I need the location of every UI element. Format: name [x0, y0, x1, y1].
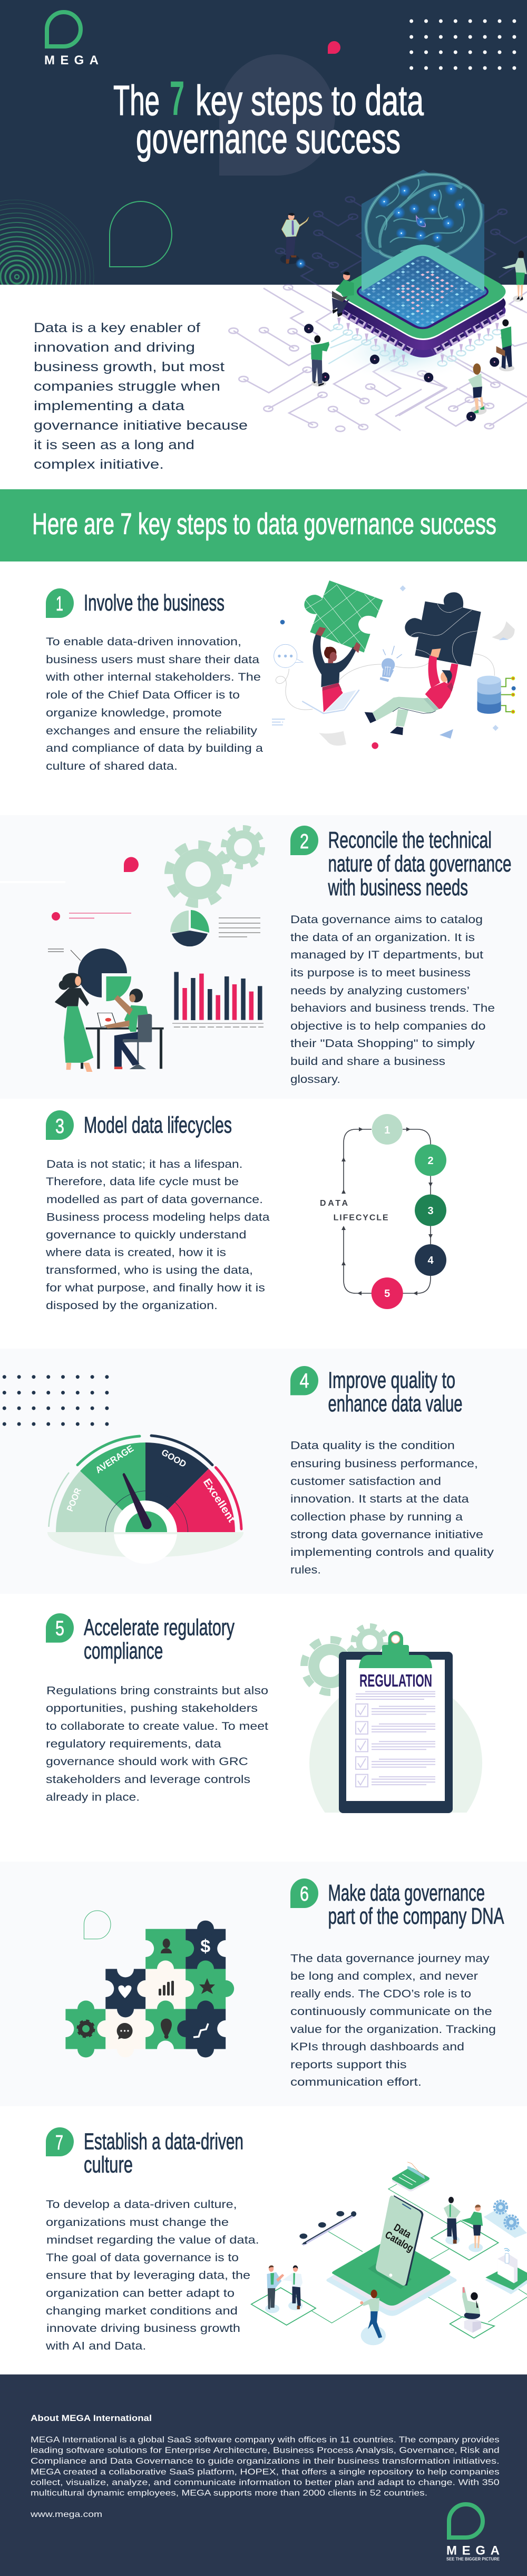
chip	[340, 245, 506, 357]
icon: heart	[118, 1986, 132, 1998]
panel: step 6	[0, 1862, 527, 2106]
small decorative shapes	[272, 585, 516, 749]
data balls	[296, 258, 499, 421]
person pointing	[280, 213, 309, 264]
icon: light bulb	[380, 646, 402, 682]
puzzle knobs and notches	[57, 1921, 234, 2057]
body 6: communication effort.	[290, 2076, 422, 2088]
node 5	[372, 1277, 403, 1309]
brain	[366, 175, 481, 260]
woman right	[468, 363, 486, 415]
panel: step 4	[0, 1349, 527, 1594]
title: governance success	[136, 115, 401, 162]
person with briefcase	[496, 319, 514, 371]
people on chip	[280, 213, 527, 421]
node 1	[372, 1114, 403, 1145]
body 2: build and share a business	[290, 1055, 445, 1068]
icon: red drop	[328, 41, 340, 54]
icon: speech bubble	[274, 644, 303, 667]
body 3: transformed, who is using the data,	[46, 1264, 253, 1276]
person: woman	[302, 627, 360, 713]
clip	[359, 1631, 432, 1668]
body 5: governance should work with GRC	[46, 1756, 248, 1768]
body 4: customer satisfaction and	[290, 1475, 441, 1488]
people pair right	[444, 2197, 483, 2248]
diagram label: LIFECYCLE	[334, 1214, 388, 1223]
footer paragraph: MEGA International is a global SaaS software company with offices in 11 countries. The company provides	[31, 2436, 500, 2445]
node 3: 3	[427, 1205, 434, 1217]
platform	[328, 2238, 455, 2314]
gauge segment: poor: POOR	[65, 1487, 83, 1513]
body 1: role of the Chief Data Officer is to	[46, 689, 240, 701]
gears on pale tile	[484, 2201, 527, 2238]
footer paragraph: multicultural dynamic employees, MEGA supports more than 2000 clients in 52 countries.	[31, 2489, 427, 2498]
node 3	[415, 1195, 446, 1226]
body 1: To enable data-driven innovation,	[46, 636, 241, 648]
icon: exclamation	[161, 2019, 172, 2039]
body 4: Data quality is the condition	[290, 1440, 455, 1452]
clipboard board	[339, 1652, 453, 1813]
circuit traces	[229, 197, 527, 431]
gauge segment: average	[80, 1442, 145, 1510]
icon: gear	[78, 2021, 94, 2037]
panel: footer	[0, 2374, 527, 2576]
heading 4	[328, 1368, 463, 1417]
intro text: Data is a key enabler of	[34, 321, 200, 335]
icon: database	[477, 676, 515, 714]
badge 6: 6	[300, 1883, 309, 1905]
node 4: 4	[427, 1255, 434, 1266]
top module	[392, 2162, 430, 2192]
panel: step 5	[46, 1613, 482, 1813]
person: man	[365, 648, 458, 735]
illustration: regulation clipboard	[300, 1623, 482, 1813]
body 3: Data is not static; it has a lifespan.	[46, 1158, 242, 1170]
body 3	[45, 1158, 270, 1312]
paper top right	[492, 621, 515, 640]
body 1: organize knowledge, promote	[46, 707, 222, 719]
badge 5	[46, 1613, 74, 1643]
icon: chat bubble	[117, 2023, 133, 2039]
badge 7	[46, 2127, 74, 2156]
logo: MEGA footer: SEE THE BIGGER PICTURE	[446, 2556, 500, 2562]
heading 7: culture	[84, 2152, 133, 2178]
body 2: their "Data Shopping" to simply	[290, 1038, 475, 1050]
outline drop	[110, 201, 172, 267]
badge 2: 2	[300, 830, 309, 853]
teal band	[362, 245, 484, 292]
body 2	[290, 914, 495, 1086]
panel: step 1	[45, 580, 516, 772]
body 5: to collaborate to create value. To meet	[46, 1720, 268, 1732]
intro text: complex initiative.	[34, 457, 164, 472]
illustration: people lifting puzzle pieces	[272, 580, 516, 749]
gauge segment: good: GOOD	[160, 1447, 188, 1469]
body 1: exchanges and ensure the reliability	[46, 725, 258, 737]
phone with data catalog: Catalog	[383, 2229, 415, 2254]
dot grid	[412, 21, 515, 68]
body 7: innovate driving business growth	[46, 2322, 240, 2335]
body 7: ensure that by leveraging data, the	[46, 2270, 250, 2282]
body 3: disposed by the organization.	[46, 1300, 218, 1312]
heading 7	[84, 2129, 243, 2178]
puzzle piece: navy	[405, 592, 481, 666]
footer website: www.mega.com	[30, 2510, 102, 2519]
body 4	[290, 1440, 494, 1576]
badge 3: 3	[55, 1115, 64, 1138]
heading 5: compliance	[84, 1638, 163, 1664]
badge 1: 1	[56, 593, 63, 615]
intro text: it is seen as a long and	[34, 438, 194, 452]
title: 7	[170, 72, 184, 125]
watermark drop shape	[219, 54, 335, 176]
icon: dollar: $	[200, 1936, 210, 1957]
footer paragraph: collect, visualize, analyze, and communicate information to better plan and adapt to change. With 350	[31, 2478, 500, 2487]
body 5: regulatory requirements, data	[46, 1738, 221, 1750]
body 1	[45, 636, 263, 772]
gauge segment: good	[145, 1442, 209, 1510]
footer paragraph: Compliance and Data Governance to guide organizations in their business transformation initiatives.	[31, 2457, 500, 2466]
body 5: Regulations bring constraints but also	[46, 1685, 268, 1697]
badge 5: 5	[55, 1618, 64, 1640]
body 7: To develop a data-driven culture,	[46, 2199, 237, 2211]
heading 6	[328, 1880, 504, 1929]
body 3: Therefore, data life cycle must be	[46, 1176, 239, 1188]
gauge segment: average: AVERAGE	[93, 1443, 135, 1475]
heading 5	[84, 1614, 235, 1664]
gears	[304, 1626, 386, 1692]
gears	[169, 828, 262, 904]
illustration: data catalog isometric	[251, 2162, 527, 2345]
body 1: with other internal stakeholders. The	[45, 671, 261, 683]
body 5: stakeholders and leverage controls	[46, 1774, 250, 1786]
people at desk	[55, 973, 164, 1072]
gauge chart	[47, 1436, 243, 1564]
title: key steps to data	[196, 77, 424, 124]
body 6: really ends. The CDO’s role is to	[290, 1988, 471, 2000]
body 5: opportunities, pushing stakeholders	[46, 1702, 258, 1715]
footer paragraph: MEGA created a collaborative SaaS platform, HOPEX, that offers a single repository to help companies	[31, 2467, 500, 2476]
footer paragraph	[31, 2436, 500, 2498]
body 4: implementing controls and quality	[290, 1546, 494, 1558]
body 2: the data of an organization. It is	[290, 932, 475, 944]
large pie chart	[48, 948, 131, 1001]
intro text: companies struggle when	[34, 379, 220, 394]
diagram: data lifecycle	[320, 1114, 446, 1309]
body 7: mindset regarding the value of data.	[46, 2234, 259, 2246]
server module	[485, 2249, 527, 2294]
panel: header	[0, 0, 527, 285]
heading 4: Improve quality to	[328, 1368, 455, 1393]
red drop	[124, 857, 139, 872]
heading 2	[328, 827, 511, 900]
body 1: and compliance of data by building a	[46, 742, 263, 754]
badge 4: 4	[299, 1370, 309, 1392]
heading 3: Model data lifecycles	[84, 1112, 232, 1138]
icon: trend line	[193, 2023, 208, 2037]
body 2: Data governance aims to catalog	[290, 914, 483, 926]
icon: star	[199, 1978, 215, 1994]
body 3: Business process modeling helps data	[46, 1212, 270, 1224]
body 4: innovation. It starts at the data	[290, 1493, 469, 1505]
intro text	[34, 321, 248, 472]
body 3: governance to quickly understand	[46, 1229, 247, 1241]
heading 5: Accelerate regulatory	[84, 1614, 235, 1640]
body 3: modelled as part of data governance.	[46, 1194, 263, 1206]
person sitting with laptop	[332, 272, 354, 317]
body 7: with AI and Data.	[45, 2340, 146, 2352]
logo: MEGA top: MEGA	[44, 53, 99, 67]
panel: step 2	[0, 815, 527, 1099]
people pair left	[267, 2265, 302, 2310]
intro text: implementing a data	[34, 399, 184, 413]
gauge needle	[122, 1473, 152, 1529]
diagram label: DATA	[320, 1199, 348, 1208]
body 3: for what purpose, and finally how it is	[46, 1282, 265, 1294]
logo: MEGA footer	[446, 2504, 500, 2562]
timeline arrow	[299, 2211, 356, 2245]
heading 7: Establish a data-driven	[84, 2129, 243, 2155]
body 4: ensuring business performance,	[290, 1458, 478, 1470]
body 7: organization can better adapt to	[46, 2288, 235, 2300]
phone with data catalog	[376, 2195, 423, 2286]
body 1: culture of shared data.	[46, 760, 178, 772]
woman top right	[502, 250, 527, 302]
footer heading: About MEGA International	[31, 2414, 152, 2423]
puzzle piece: green	[304, 580, 383, 653]
footer paragraph: leading software solutions for Enterprise Architecture, Business Process Analysis, Governance, Risk and	[31, 2446, 500, 2455]
body 2: objective is to help companies do	[290, 1020, 486, 1032]
illustration: analysts with charts	[0, 828, 264, 1072]
node 1: 1	[384, 1125, 390, 1136]
body 4: collection phase by running a	[290, 1511, 463, 1523]
floor circles	[265, 2235, 483, 2345]
body 2: glossary.	[290, 1073, 340, 1086]
dot grid	[4, 1377, 108, 1424]
clipboard title: REGULATION	[359, 1671, 432, 1690]
intro text: innovation and driving	[34, 340, 195, 355]
body 7: changing market conditions and	[46, 2305, 238, 2317]
diagram label	[320, 1199, 388, 1223]
outline drop	[84, 1911, 111, 1939]
logo: MEGA footer: MEGA	[446, 2544, 500, 2558]
body 6: KPIs through dashboards and	[290, 2041, 464, 2053]
badge 4	[290, 1366, 318, 1395]
panel: step 3	[45, 1110, 446, 1312]
icon: person	[161, 1939, 172, 1953]
badge 2	[290, 826, 318, 855]
body 7: organizations must change the	[46, 2216, 229, 2229]
body 6	[290, 1953, 496, 2088]
heading 1: Involve the business	[84, 590, 225, 616]
node 4	[415, 1244, 446, 1276]
badge 6	[290, 1878, 318, 1908]
body 6: be long and complex, and never	[290, 1970, 478, 1982]
body 6: The data governance journey may	[290, 1953, 490, 1965]
badge 1	[46, 588, 74, 618]
body 7: The goal of data governance is to	[46, 2252, 239, 2264]
node 2	[415, 1144, 446, 1176]
connector lines and floor diamonds	[251, 2184, 527, 2338]
document lines and checklist	[356, 1692, 435, 1787]
banner: green heading	[0, 489, 527, 561]
body 7	[45, 2199, 259, 2352]
body 2: behaviors and business trends. The	[290, 1002, 495, 1014]
person standing left	[311, 335, 329, 386]
puzzle grid with icons	[57, 1921, 234, 2057]
body 3: where data is created, how it is	[45, 1247, 226, 1259]
body 1: business users must share their data	[46, 654, 259, 666]
pink legend	[52, 912, 131, 921]
node 5: 5	[384, 1288, 390, 1300]
body 2: its purpose is to meet business	[290, 967, 471, 979]
title	[113, 72, 424, 162]
heading 4: enhance data value	[328, 1391, 463, 1417]
body 2: managed by IT departments, but	[290, 949, 483, 961]
body 6: value for the organization. Tracking	[290, 2023, 496, 2036]
title: The	[113, 77, 160, 124]
concentric arcs	[0, 199, 94, 285]
node 2: 2	[427, 1155, 434, 1167]
puzzle squares	[65, 1929, 226, 2049]
body 4: strong data governance initiative	[290, 1528, 483, 1541]
person walking	[360, 2290, 382, 2338]
illustration: chip with brain and people	[229, 170, 527, 431]
body 5: already in place.	[46, 1791, 140, 1804]
translucent hexagon	[362, 170, 484, 292]
gauge segment: excellent: Excellent	[201, 1477, 238, 1525]
body 6: reports support this	[290, 2059, 407, 2071]
person seated	[462, 2287, 481, 2333]
gauge segment: poor	[56, 1471, 122, 1532]
paper sheet	[346, 1660, 445, 1801]
phone with data catalog: Data	[392, 2222, 413, 2241]
badge 7: 7	[55, 2132, 63, 2154]
badge 3	[46, 1110, 74, 1140]
body 5	[46, 1685, 268, 1804]
body 6: continuously communicate on the	[290, 2006, 492, 2018]
icon: signal bars	[159, 1981, 174, 1996]
logo: MEGA top	[44, 12, 99, 67]
small pie chart	[170, 910, 260, 946]
panel: step 7	[45, 2127, 527, 2352]
intro text: governance initiative because	[34, 418, 248, 433]
body 2: needs by analyzing customers’	[290, 985, 470, 997]
bar chart	[172, 972, 264, 1027]
intro text: business growth, but most	[34, 360, 225, 374]
body 4: rules.	[290, 1564, 321, 1576]
gauge segment: excellent	[168, 1469, 238, 1532]
